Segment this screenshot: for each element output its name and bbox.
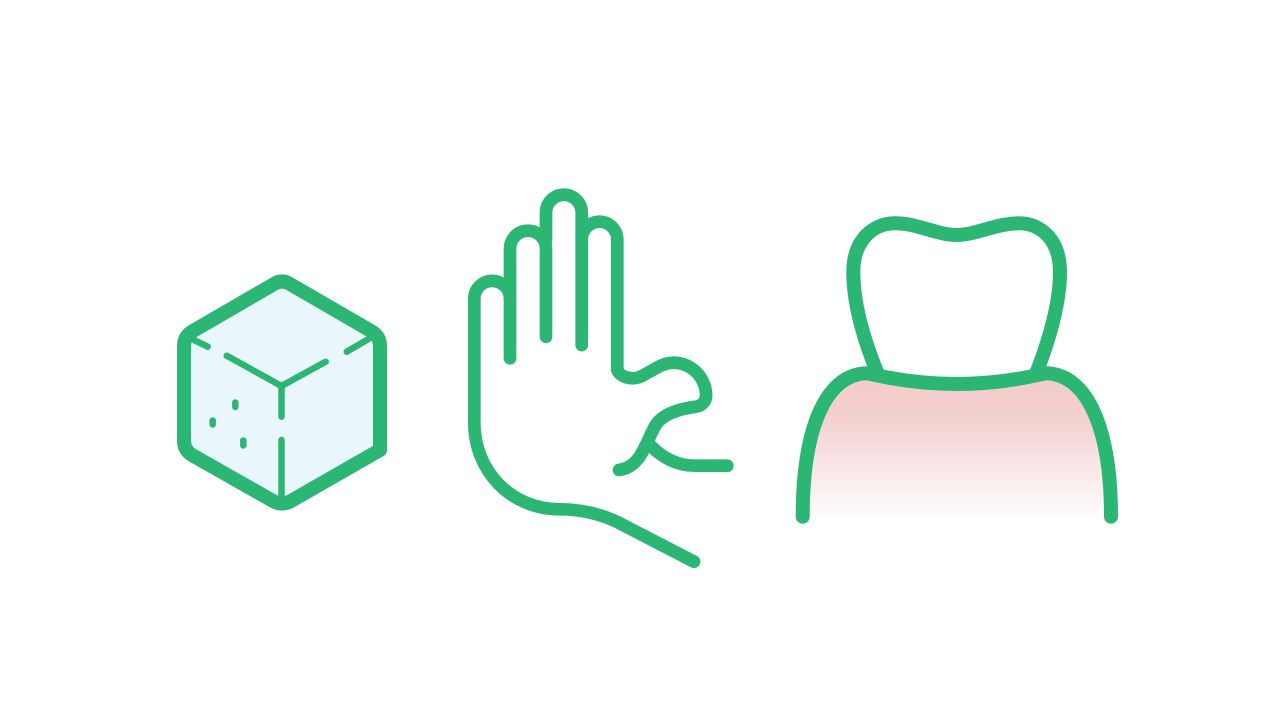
index finger and thumb (582, 222, 706, 470)
gum line (803, 373, 1111, 517)
tooth crown (853, 223, 1060, 372)
icon: raised hand (474, 195, 727, 562)
ring finger (510, 231, 546, 337)
icon: sugar cube (184, 282, 380, 504)
hand outline and fingers (474, 281, 694, 562)
cube inner edges (192, 337, 372, 498)
middle finger (546, 195, 582, 345)
sugar grains (213, 402, 243, 446)
cube outline (184, 282, 380, 504)
icon: tooth with inflamed gum (803, 223, 1111, 518)
thumb crease (652, 447, 727, 466)
gum fill (803, 373, 1111, 518)
